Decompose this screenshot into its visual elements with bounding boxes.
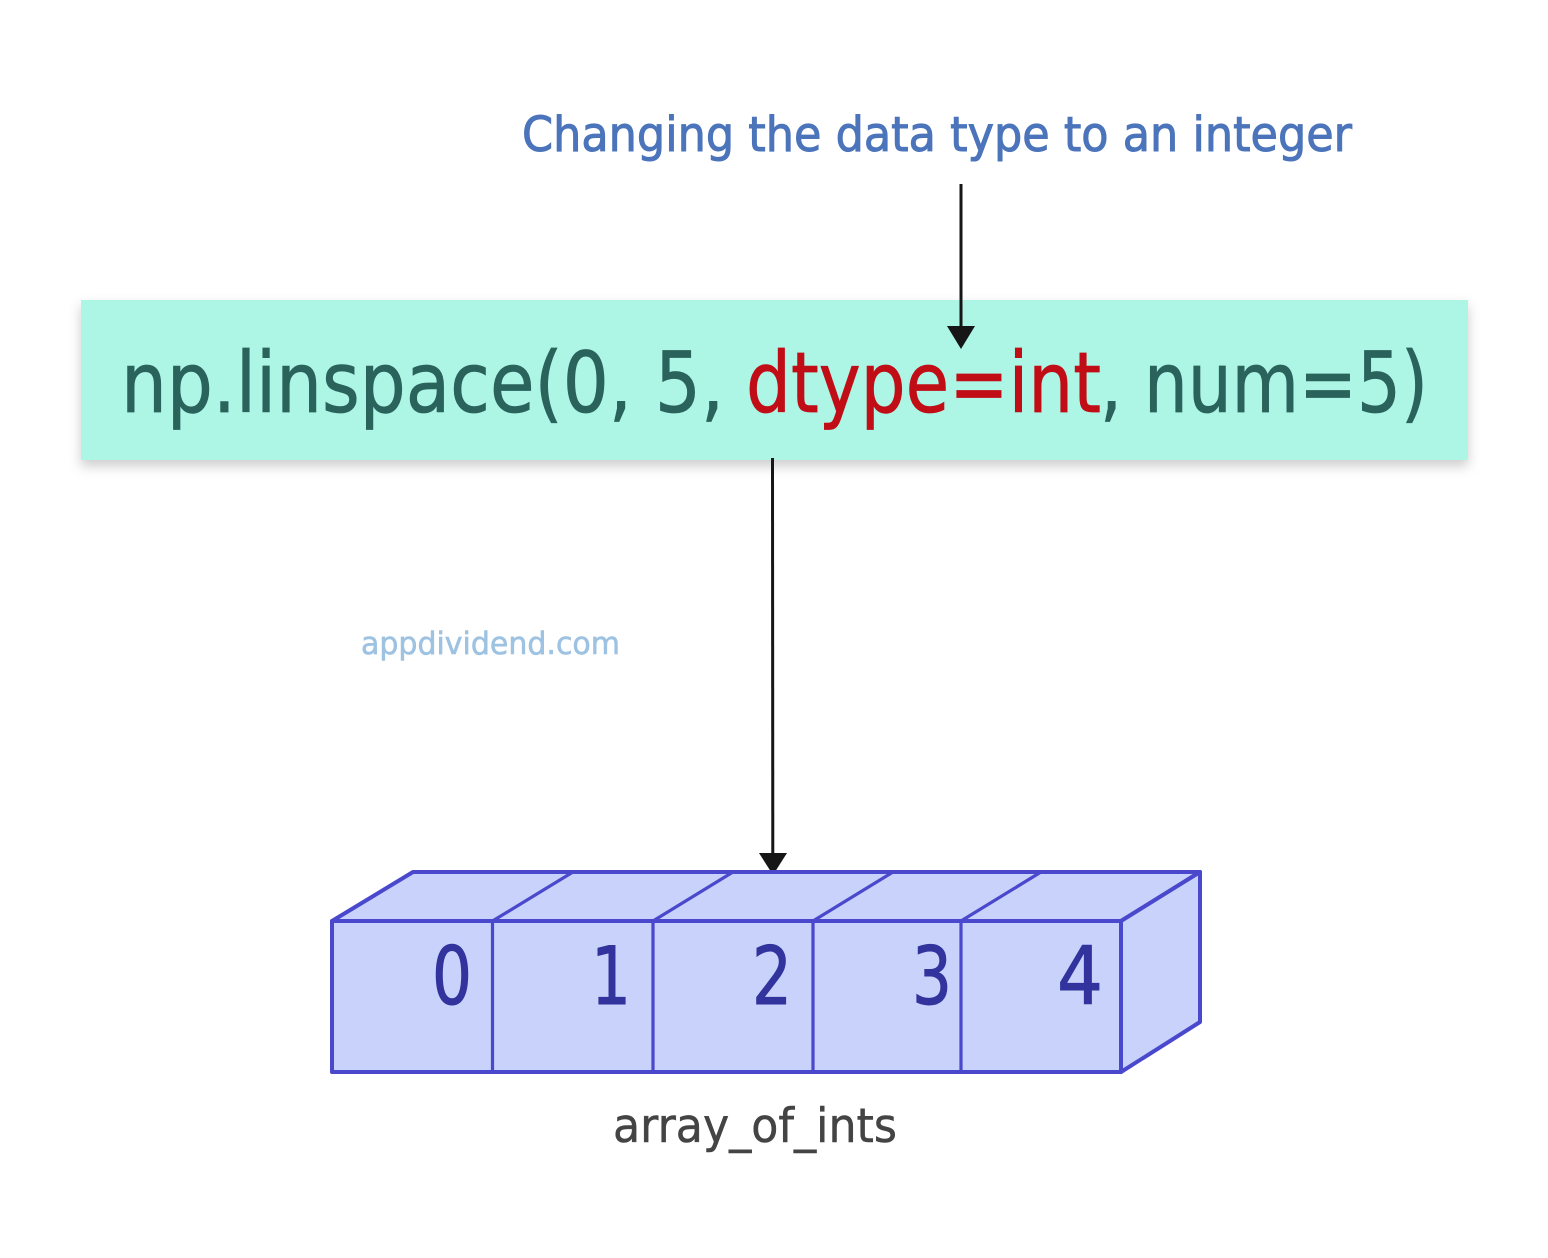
code text: dtype=int bbox=[746, 334, 1101, 432]
code text bbox=[121, 334, 1428, 432]
arrow: annotation to dtype bbox=[947, 184, 975, 349]
watermark: appdividend.com bbox=[361, 626, 620, 662]
array diagram bbox=[332, 872, 1200, 1072]
code text: , num=5) bbox=[1100, 334, 1428, 432]
cell dividers bbox=[492, 872, 1041, 1072]
array values: 2 bbox=[752, 930, 792, 1023]
array values: 3 bbox=[912, 930, 952, 1023]
code text: np.linspace(0, 5, bbox=[121, 334, 724, 432]
array values: 1 bbox=[591, 930, 631, 1023]
array values bbox=[432, 930, 1103, 1023]
annotation heading: Changing the data type to an integer bbox=[522, 107, 1352, 163]
array values: 0 bbox=[432, 930, 472, 1023]
array label: array_of_ints bbox=[613, 1099, 897, 1154]
panel: code expression bbox=[81, 300, 1468, 460]
array values: 4 bbox=[1057, 930, 1103, 1023]
box faces bbox=[332, 872, 1200, 1072]
arrow: code to array bbox=[759, 458, 787, 875]
